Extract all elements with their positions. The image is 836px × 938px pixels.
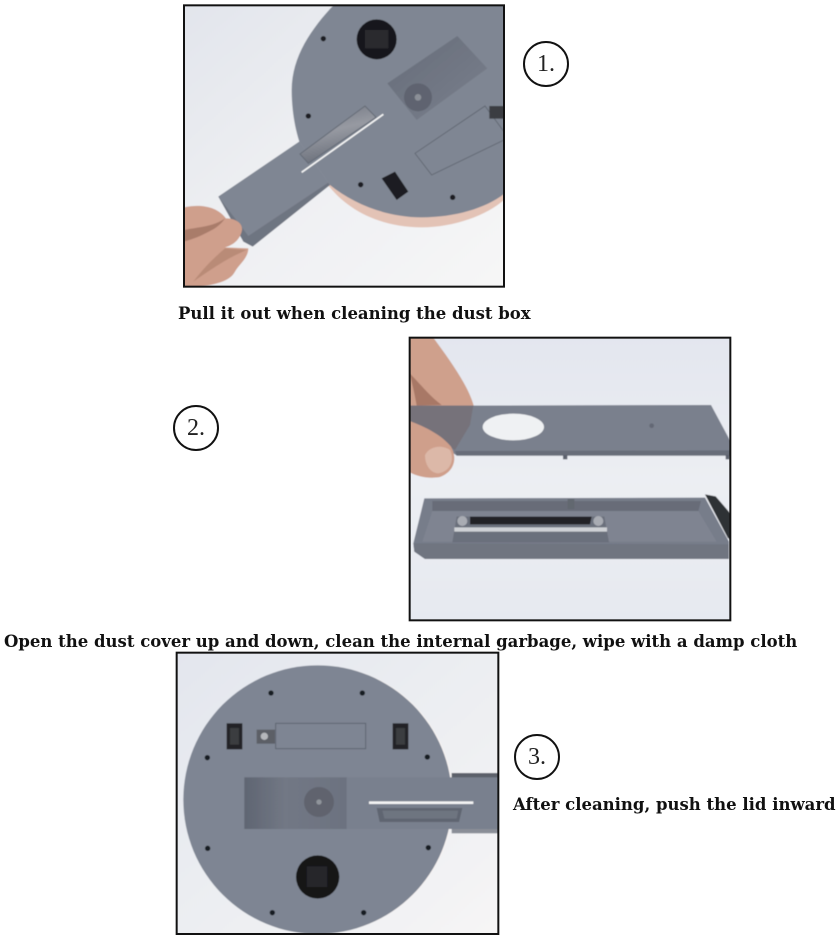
top wheel [357, 19, 397, 59]
step number 1 [523, 41, 569, 87]
robot rim [185, 666, 453, 934]
hand [184, 206, 248, 287]
right wheel [393, 723, 408, 749]
battery clip [489, 106, 504, 119]
tray floor [591, 516, 592, 517]
caption 3: After cleaning, push the lid inward [513, 795, 836, 814]
white slit [369, 801, 473, 804]
upper lid [410, 405, 730, 459]
robot body rim [328, 184, 503, 228]
lid dot [649, 423, 654, 428]
battery cover [276, 723, 366, 749]
white slit [302, 114, 383, 172]
lid [368, 776, 498, 830]
screws [306, 36, 455, 200]
robot underside [292, 5, 504, 217]
end flap [705, 494, 730, 540]
left wheel [227, 723, 242, 749]
battery clip [257, 730, 275, 744]
white bar [454, 527, 607, 532]
slot screws [457, 516, 467, 526]
handle recess [300, 106, 376, 163]
bottom wheel [296, 855, 339, 899]
upper finger [410, 338, 474, 407]
step number 3 [514, 734, 560, 780]
dust compartment [244, 777, 348, 829]
pull-out lid [218, 106, 383, 247]
step number 1: 1. [537, 51, 555, 77]
lid hole [483, 414, 544, 440]
thumb [410, 421, 454, 478]
photo 2: opened dust cover [408, 336, 732, 622]
step number 3: 3. [528, 744, 546, 770]
tray front face [413, 543, 729, 559]
step number 2 [173, 405, 219, 451]
lower tray [413, 494, 730, 559]
tray back wall [432, 501, 701, 511]
handle recess [377, 808, 462, 822]
post [568, 499, 574, 502]
battery cover outline [415, 106, 504, 175]
photo 3: pushing the lid inward [176, 652, 500, 935]
small wheel [382, 172, 408, 200]
screws [205, 690, 431, 915]
slot assembly [452, 517, 609, 542]
step number 2: 2. [187, 415, 205, 441]
lid pins [563, 455, 567, 459]
caption 2: Open the dust cover up and down, clean the internal garbage, wipe with a damp cloth [4, 632, 797, 651]
dust compartment [387, 36, 487, 120]
lid outer shadow bands [452, 773, 498, 778]
photo 1: pulling out the dust box [183, 4, 505, 288]
robot underside [183, 665, 452, 934]
caption 1: Pull it out when cleaning the dust box [178, 304, 531, 323]
dark slot [470, 517, 592, 524]
